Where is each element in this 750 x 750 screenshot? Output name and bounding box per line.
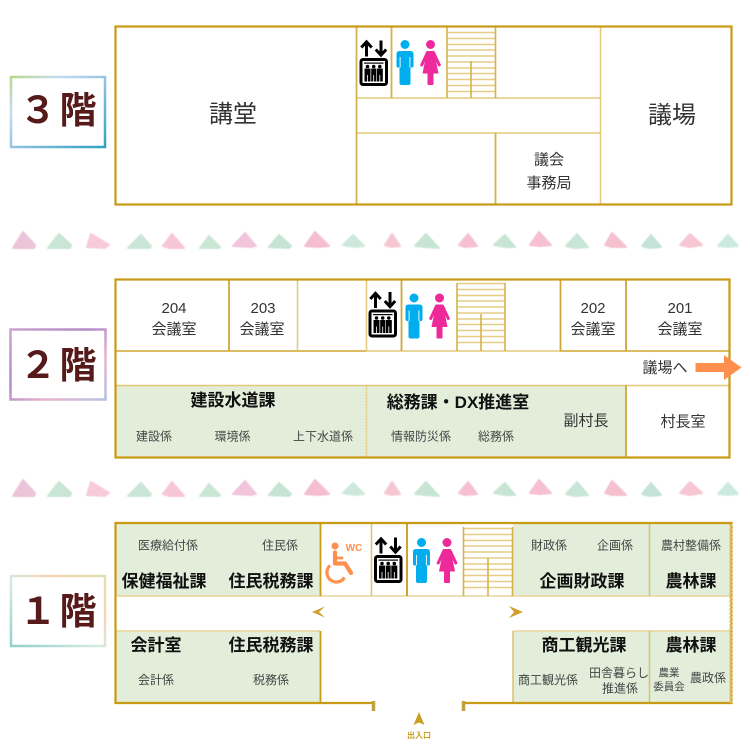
department: 農林課 south: 農林課 (666, 636, 716, 655)
room label: 203 会議室: 会議室 (239, 320, 285, 338)
department: 農林課 south: 農政係 (690, 671, 726, 685)
department: 企画財政課 (531, 538, 633, 591)
icon: women's restroom 1F (438, 538, 456, 583)
icon: men's restroom 1F (413, 538, 430, 583)
icon: elevator 1F (374, 538, 402, 583)
room label: 201 会議室 (657, 300, 703, 338)
department: 建設水道課: 建設水道課 (190, 391, 276, 410)
icon: entrance arrow (414, 712, 424, 725)
room label: 204 会議室 (151, 300, 197, 338)
room label: 204 会議室: 204 (161, 300, 187, 317)
room label: 議会事務局 (526, 150, 572, 192)
icon: women's restroom 3F (422, 40, 439, 85)
floor label: 3階: ３ (20, 90, 56, 131)
floor plan: 1st floor (115, 523, 732, 711)
icon: men's restroom 3F (396, 40, 414, 85)
department: 会計室: 会計室 (130, 636, 182, 655)
room label: 議会事務局: 議会 (534, 150, 564, 168)
department: 農林課 south (653, 636, 726, 693)
department: 商工観光課 (518, 635, 649, 696)
icon: women's restroom 2F (431, 294, 448, 338)
floor label: 2階: ２ (20, 345, 56, 386)
department: 建設水道課: 上下水道係 (293, 430, 353, 444)
room label: 204 会議室: 会議室 (151, 320, 197, 338)
department: 住民税務課 north: 住民係 (262, 538, 298, 552)
department: 建設水道課: 環境係 (214, 430, 251, 444)
label: 出入口: 出入口 (407, 730, 431, 740)
icon: elevator 2F (368, 292, 397, 338)
department: 総務課・DX推進室: 総務課・DX推進室 (387, 393, 529, 412)
department: 商工観光課: 商工観光課 (542, 635, 626, 655)
department: 保健福祉課: 医療給付係 (138, 538, 198, 552)
room label: 202 会議室: 202 (580, 300, 606, 317)
icon: men's restroom 2F (406, 294, 422, 338)
floor label: 1階: １ (20, 591, 56, 632)
department: 農林課 south: 委員会 (653, 680, 685, 693)
stairs (457, 283, 505, 351)
department: 企画財政課: 企画財政課 (540, 571, 624, 591)
arrow: corridor east (509, 606, 523, 618)
direction label: 議場へ: 議場へ (642, 358, 688, 376)
department: 商工観光課: 推進係 (602, 680, 638, 696)
department: 住民税務課 north: 住民税務課 (228, 572, 314, 591)
floor plan: 2nd floor (115, 279, 730, 458)
department: 保健福祉課: 保健福祉課 (122, 572, 206, 591)
floor label: 3階: 階 (60, 90, 96, 131)
decorative watercolor triangles row 1 (13, 232, 738, 248)
room label: 203 会議室: 203 (250, 300, 276, 317)
decorative watercolor triangles row 2 (13, 480, 738, 496)
arrow: corridor west (312, 606, 325, 618)
department: 住民税務課 north (228, 538, 314, 591)
room label: 議会事務局: 事務局 (526, 175, 572, 192)
department: 企画財政課: 企画係 (597, 538, 633, 552)
department: 農林課 north: 農林課 (666, 572, 716, 591)
department: 総務課・DX推進室 (387, 393, 529, 444)
department: 住民税務課 south: 住民税務課 (228, 636, 314, 655)
stairs (463, 527, 512, 596)
department: 住民税務課 south: 税務係 (253, 673, 289, 687)
department: 総務課・DX推進室: 情報防災係 (391, 428, 451, 444)
floor label: 1階: 階 (60, 591, 96, 632)
room label: 副村長: 副村長 (563, 412, 609, 430)
department: 商工観光課: 商工観光係 (518, 673, 578, 687)
floor label: 2階 (10, 330, 106, 400)
department: 保健福祉課 (122, 538, 206, 591)
room label: 203 会議室 (239, 300, 285, 338)
outer wall (116, 26, 732, 204)
icon: accessible WC: WC (346, 543, 362, 554)
room label: 201 会議室: 会議室 (657, 320, 703, 338)
arrow: to assembly hall (696, 355, 742, 380)
outer wall (116, 280, 730, 458)
department: 会計室: 会計係 (138, 672, 174, 687)
floor label: 3階 (11, 77, 105, 147)
icon: accessible WC (327, 542, 362, 582)
department: 住民税務課 south (228, 636, 314, 687)
room label: 201 会議室: 201 (667, 300, 693, 317)
entrance gate posts (374, 701, 464, 711)
department: 農林課 north: 農村整備係 (661, 538, 721, 552)
stairs (447, 27, 496, 98)
floor label: 1階 (11, 576, 105, 646)
room label: 村長室: 村長室 (660, 414, 706, 430)
department: 建設水道課: 建設係 (136, 430, 172, 444)
department: 農林課 south: 農業 (658, 666, 680, 679)
icon: elevator 3F (360, 40, 388, 86)
floor label: 2階: 階 (60, 345, 96, 386)
department: 総務課・DX推進室: 総務係 (478, 428, 514, 444)
room label: 202 会議室 (570, 300, 616, 338)
floor plan: 3rd floor (116, 26, 732, 205)
outer wall (116, 523, 732, 703)
department: 農林課 north (661, 538, 721, 591)
department: 商工観光課: 田舎暮らし (589, 666, 649, 680)
room label: 202 会議室: 会議室 (570, 320, 616, 338)
department: 企画財政課: 財政係 (531, 538, 567, 552)
room label: 講堂: 講堂 (209, 101, 257, 128)
room label: 議場: 議場 (648, 102, 696, 129)
department: 建設水道課 (136, 391, 353, 444)
department: 会計室 (130, 636, 182, 687)
